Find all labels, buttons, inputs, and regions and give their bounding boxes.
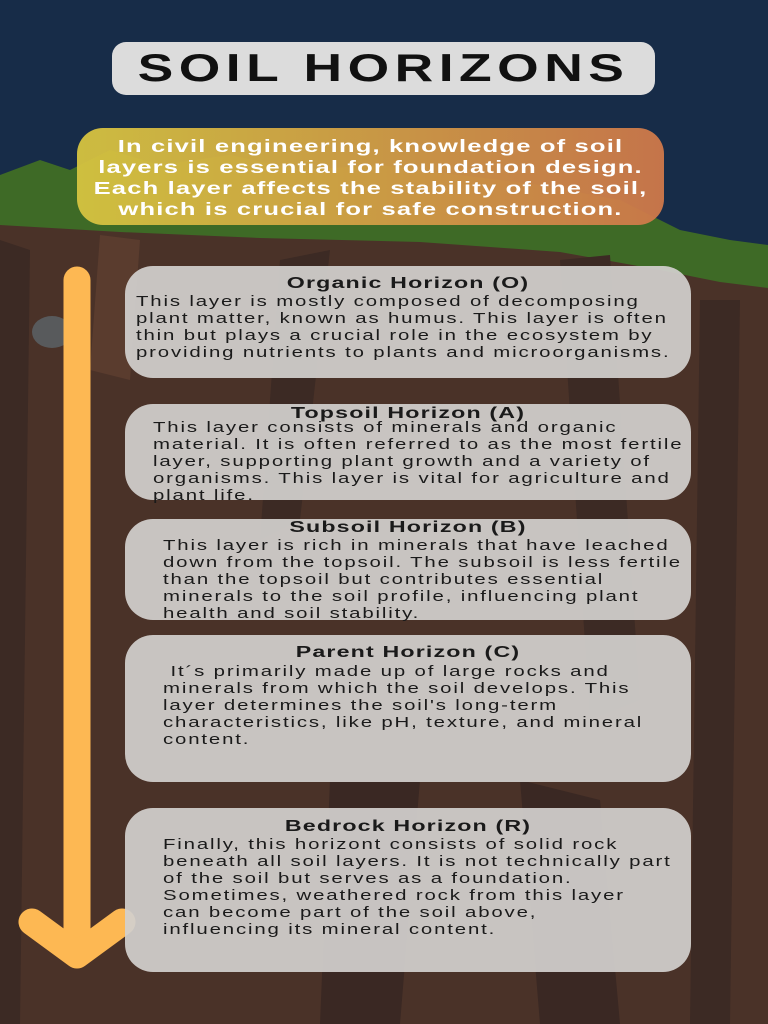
card: subsoil horizon: minerals to the soil profile, influencing plant — [163, 588, 639, 605]
card: parent horizon: content. — [163, 731, 250, 748]
card: bedrock horizon: Finally, this horizont consists of solid rock — [163, 836, 618, 853]
card: topsoil horizon: plant life. — [153, 487, 255, 504]
card: bedrock horizon — [125, 808, 691, 972]
card: topsoil horizon: material. It is often referred to as the most fertile — [153, 436, 683, 453]
card: bedrock horizon: influencing its mineral content. — [163, 921, 496, 938]
card: bedrock horizon: Bedrock Horizon (R) — [285, 818, 531, 835]
card: topsoil horizon — [125, 404, 691, 500]
card: subsoil horizon: Subsoil Horizon (B) — [289, 519, 527, 536]
card: subsoil horizon: This layer is rich in minerals that have leached — [163, 537, 670, 554]
card: bedrock horizon: Sometimes, weathered rock from this layer — [163, 887, 625, 904]
card: organic horizon: This layer is mostly composed of decomposing — [136, 293, 640, 310]
card: topsoil horizon: layer, supporting plant growth and a variety of — [153, 453, 651, 470]
card: topsoil horizon: organisms. This layer is vital for agriculture and — [153, 470, 671, 487]
card: parent horizon: It´s primarily made up of large rocks and — [171, 663, 610, 680]
card: organic horizon — [125, 266, 691, 378]
card: subsoil horizon — [125, 519, 691, 620]
card: parent horizon: layer determines the soil's long-term — [163, 697, 558, 714]
card: subsoil horizon: health and soil stability. — [163, 605, 420, 622]
card: topsoil horizon: This layer consists of minerals and organic — [153, 419, 617, 436]
card: bedrock horizon: beneath all soil layers. It is not technically part — [163, 853, 672, 870]
card: organic horizon: Organic Horizon (O) — [287, 275, 529, 292]
arrow — [18, 266, 136, 968]
intro callout — [77, 128, 664, 225]
card: parent horizon: minerals from which the soil develops. This — [163, 680, 630, 697]
intro callout: Each layer affects the stability of the soil, — [94, 178, 647, 198]
card: parent horizon: Parent Horizon (C) — [296, 644, 520, 661]
title: SOIL HORIZONS — [138, 47, 629, 90]
card: organic horizon: plant matter, known as humus. This layer is often — [136, 310, 668, 327]
card: organic horizon: providing nutrients to plants and microorganisms. — [136, 344, 670, 361]
card: subsoil horizon: than the topsoil but contributes essential — [163, 571, 604, 588]
card: subsoil horizon: down from the topsoil. The subsoil is less fertile — [163, 554, 682, 571]
card: organic horizon: thin but plays a crucial role in the ecosystem by — [136, 327, 653, 344]
intro callout: layers is essential for foundation design. — [98, 157, 643, 177]
intro callout: In civil engineering, knowledge of soil — [118, 136, 623, 156]
intro callout: which is crucial for safe construction. — [118, 199, 623, 219]
card: topsoil horizon: Topsoil Horizon (A) — [291, 405, 525, 422]
card: parent horizon: characteristics, like pH, texture, and mineral — [163, 714, 643, 731]
card: bedrock horizon: of the soil but serves as a foundation. — [163, 870, 573, 887]
card: bedrock horizon: can become part of the soil above, — [163, 904, 537, 921]
card: parent horizon — [125, 635, 691, 782]
